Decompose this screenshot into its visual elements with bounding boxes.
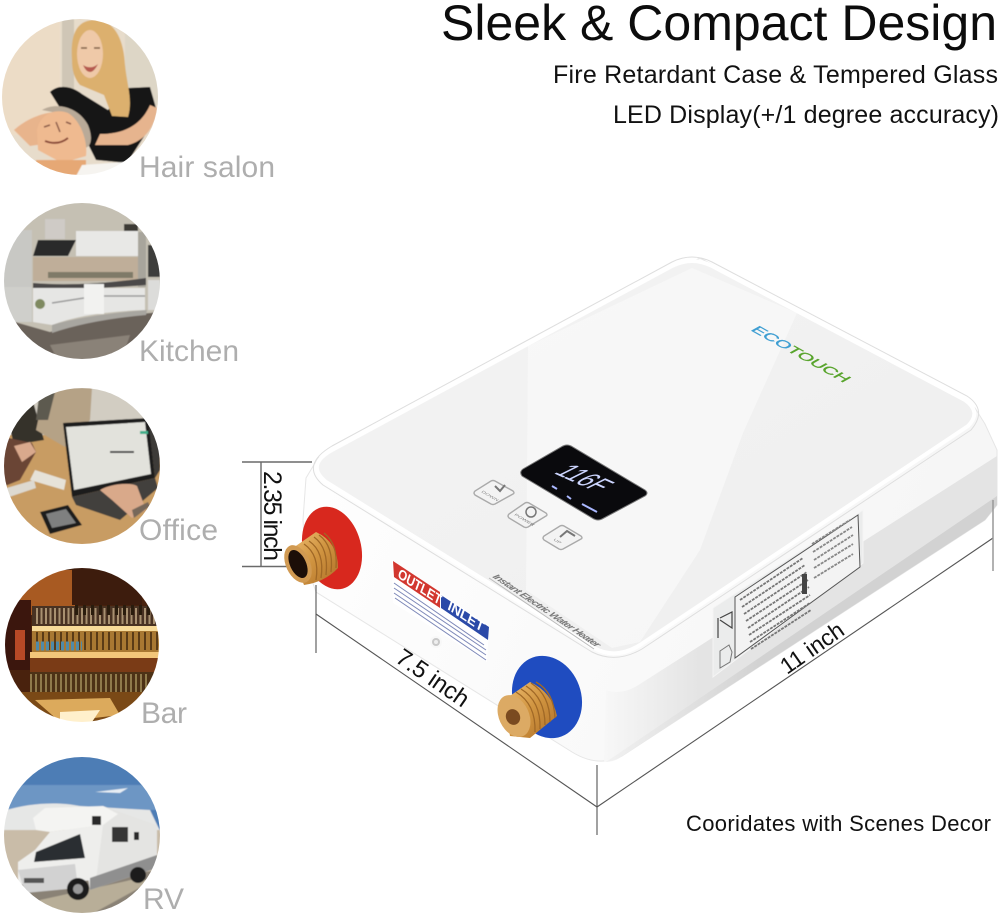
- side band shading: [604, 456, 997, 762]
- glass reflection: [526, 268, 797, 648]
- button: up: UP: [552, 538, 563, 546]
- outlet fitting: red: [279, 500, 371, 596]
- dimension: width 11 inch: [597, 500, 993, 835]
- button: down: DOWN: [480, 490, 500, 503]
- caption: Cooridates with Scenes Decor: [686, 811, 991, 836]
- subtitle: case and glass: Fire Retardant Case & Tempered Glass: [553, 61, 998, 89]
- button: power: POWER: [513, 513, 536, 527]
- logo: ecotouch: ECOTOUCH: [747, 324, 854, 385]
- LED display: [521, 445, 647, 520]
- dimension: height 2.35 inch: [242, 462, 312, 566]
- model text: instant electric water heater: Instant Electric Water Heater: [490, 573, 604, 650]
- sticker: outlet and inlet: OUTLET: [396, 567, 443, 608]
- screw: [430, 636, 442, 648]
- sticker: outlet and inlet: INLET: [446, 599, 486, 636]
- label: hair salon: Hair salon: [139, 151, 275, 184]
- heater body: [303, 258, 997, 761]
- button: power: [508, 502, 547, 528]
- glass top panel: [317, 261, 974, 653]
- inlet fitting: blue: [491, 646, 593, 748]
- dimension: height 2.35 inch: 2.35 inch: [258, 471, 286, 561]
- product: water heater: [279, 257, 997, 762]
- dimension: width 11 inch: 11 inch: [775, 617, 849, 679]
- label: office: Office: [139, 514, 218, 547]
- subtitle: LED display: LED Display(+/1 degree accuracy): [613, 101, 999, 129]
- button: down: [474, 480, 514, 504]
- scene photo: bar: [5, 568, 159, 722]
- dimension: depth 7.5 inch: [316, 585, 597, 807]
- scene photo: hair salon: [2, 19, 158, 175]
- glass rim: [313, 257, 979, 657]
- scene photo: office: [4, 388, 160, 544]
- button: up: [543, 526, 582, 550]
- scene photo: kitchen: [4, 203, 160, 359]
- label: kitchen: Kitchen: [139, 335, 239, 368]
- label: bar: Bar: [141, 697, 187, 730]
- dimension: depth 7.5 inch: 7.5 inch: [391, 644, 474, 713]
- LED display: 116F: [547, 461, 622, 495]
- scene photo: RV: [0, 755, 165, 915]
- spec label: [713, 510, 863, 677]
- sticker: outlet and inlet: [392, 560, 489, 662]
